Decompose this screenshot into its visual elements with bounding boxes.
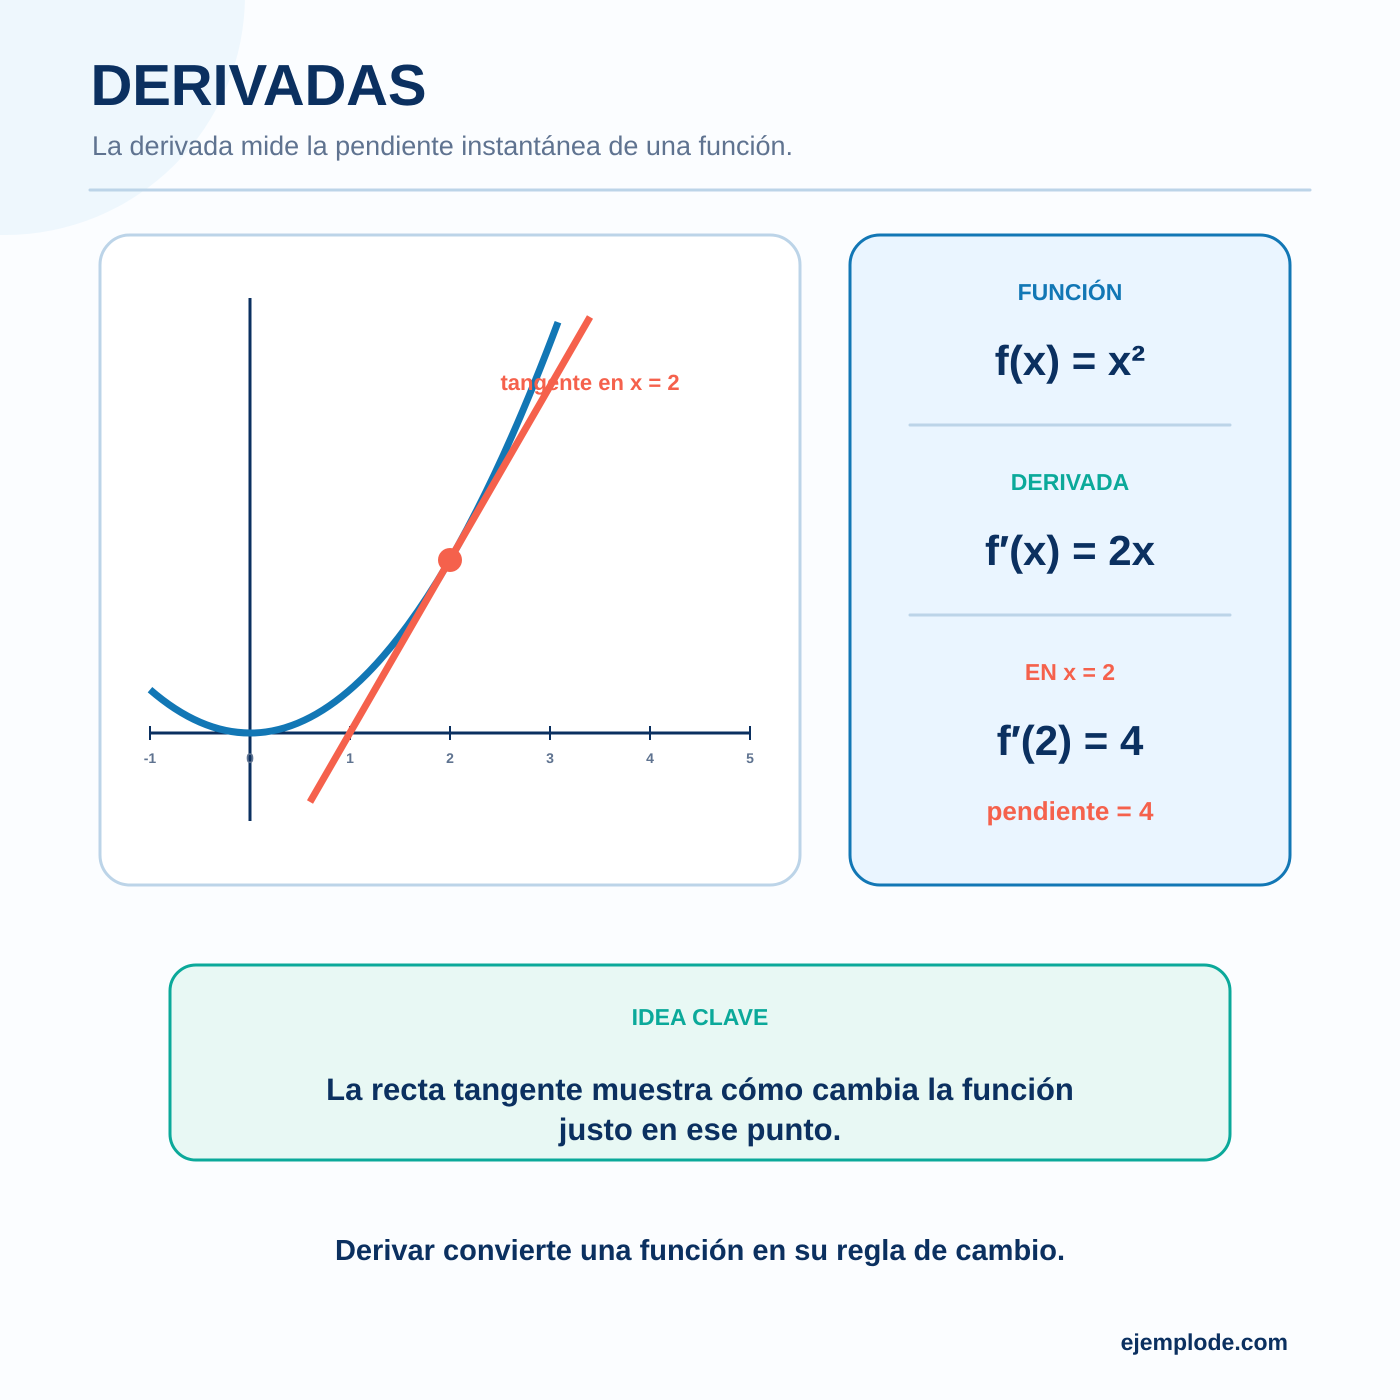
axis tick labels: -1 — [144, 750, 156, 766]
x axis — [150, 726, 750, 740]
formula: derivative: f′(x) = 2x — [985, 527, 1156, 574]
panel: formulas — [850, 235, 1290, 885]
label: at x = 2: EN x = 2 — [1025, 659, 1115, 685]
formula: value at 2: f′(2) = 4 — [997, 717, 1144, 764]
key idea text: La recta tangente muestra cómo cambia la función — [326, 1072, 1074, 1107]
axis tick labels: 3 — [546, 750, 554, 766]
axis tick labels: 2 — [446, 750, 454, 766]
closing statement: Derivar convierte una función en su regla de cambio. — [335, 1235, 1065, 1267]
formula: function: f(x) = x² — [995, 337, 1145, 384]
subtitle: La derivada mide la pendiente instantánea de una función. — [92, 131, 793, 161]
title: DERIVADAS — [90, 53, 426, 118]
label: derivative: DERIVADA — [1011, 469, 1129, 495]
label: function: FUNCIÓN — [1018, 279, 1122, 305]
panel: graph — [100, 235, 800, 885]
tangent line at x = 2 — [310, 317, 590, 802]
panel: key idea — [170, 965, 1230, 1160]
axis tick labels: 0 — [246, 750, 254, 766]
key idea text: justo en ese punto. — [558, 1112, 841, 1147]
axis tick labels: 5 — [746, 750, 754, 766]
curve: f(x) = x squared — [150, 322, 558, 733]
axis tick labels: 1 — [346, 750, 354, 766]
tangent label: tangente en x = 2 — [500, 370, 680, 395]
axis tick labels: 4 — [646, 750, 654, 766]
axis tick labels — [144, 750, 754, 766]
source: ejemplode.com — [1121, 1329, 1288, 1355]
tangent point — [438, 548, 462, 572]
y axis — [248, 298, 252, 821]
slope note: pendiente = 4 — [987, 796, 1154, 826]
decorative corner circle — [0, 0, 245, 235]
key idea label: IDEA CLAVE — [632, 1004, 768, 1030]
